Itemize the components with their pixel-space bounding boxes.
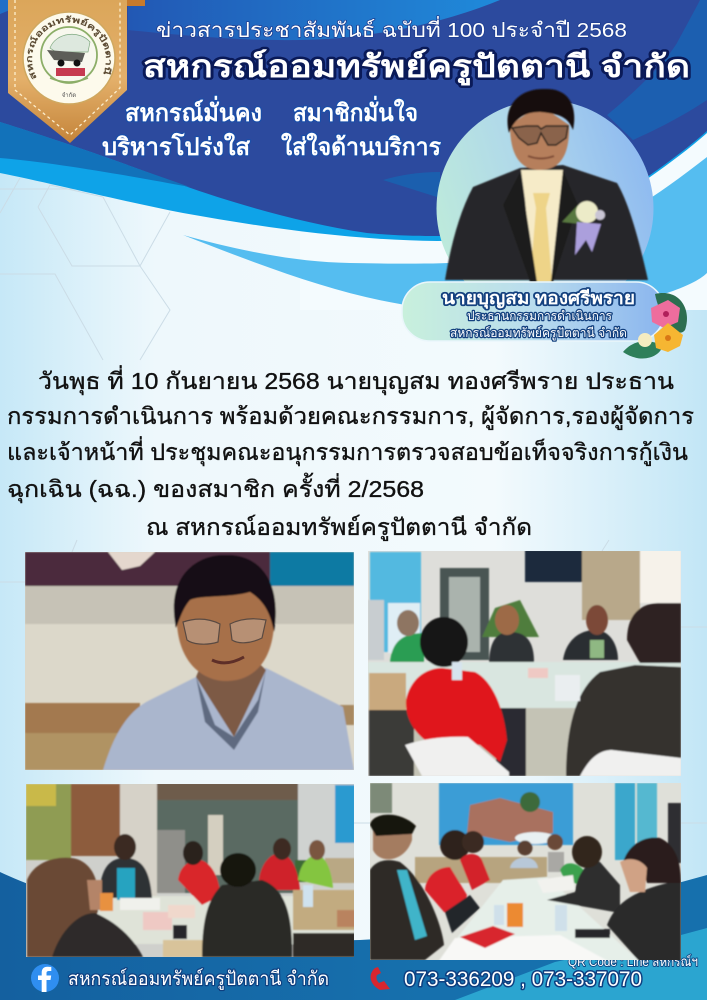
table items (452, 662, 462, 680)
body paragraph: กรรมการดำเนินการ พร้อมด้วยคณะกรรมการ, ผู้จัดการ,รองผู้จัดการ (7, 403, 694, 430)
dark navy field (0, 0, 707, 236)
background: bottom wave (0, 872, 707, 1000)
photo: meeting by glass doors (26, 783, 355, 957)
name plate (402, 282, 664, 341)
photo: meeting long table (370, 783, 681, 962)
red man 1 (425, 867, 467, 917)
slogans (102, 95, 441, 161)
slogans: สมาชิกมั่นใจ (293, 95, 418, 127)
hair (507, 89, 574, 133)
light blue swoosh (183, 157, 707, 313)
glasses (512, 126, 568, 145)
name plate: ประธานกรรมการดำเนินการ (467, 309, 612, 323)
green person (560, 862, 584, 884)
portrait of chairman (445, 89, 648, 282)
table (98, 896, 354, 944)
man left (370, 860, 444, 960)
dark man (547, 862, 620, 913)
body paragraph: และเจ้าหน้าที่ ประชุมคณะอนุกรรมการตรวจสอบข้อเท็จจริงการกู้เงิน (7, 436, 688, 466)
cyan band (0, 0, 707, 241)
woman left (27, 858, 98, 957)
portrait circle (436, 100, 654, 317)
logo seal (22, 12, 116, 104)
people (99, 858, 152, 898)
suit (445, 165, 648, 280)
slogans: ใส่ใจด้านบริการ (281, 132, 441, 161)
background: hexagon pattern (0, 178, 707, 823)
seated people (390, 633, 424, 662)
name plate: สหกรณ์ออมทรัพย์ครูปัตตานี จำกัด (450, 326, 627, 341)
footer: phone: 073-336209 , 073-337070 (404, 968, 642, 991)
title: สหกรณ์ออมทรัพย์ครูปัตตานี จำกัด (143, 49, 690, 86)
corsage (562, 205, 582, 224)
chairs (405, 737, 509, 776)
top band (128, 0, 500, 40)
table (458, 876, 640, 960)
footer: facebook (31, 964, 329, 992)
logo seal: จำกัด (62, 92, 76, 99)
background: top wave bands (0, 0, 707, 313)
body paragraph: ณ สหกรณ์ออมทรัพย์ครูปัตตานี จำกัด (146, 514, 532, 541)
back dark suit (566, 665, 681, 776)
logo ribbon (8, 0, 145, 143)
name plate: นายบุญสม ทองศรีพราย (442, 288, 635, 309)
slogans: บริหารโปร่งใส (102, 132, 250, 161)
table items (100, 893, 113, 911)
face (177, 590, 274, 681)
back dark person (202, 880, 292, 957)
footer: facebook: สหกรณ์ออมทรัพย์ครูปัตตานี จำกัด (68, 968, 329, 990)
icon: phone (371, 967, 390, 990)
body paragraph (7, 365, 694, 541)
icon: facebook (31, 964, 59, 992)
logo seal: สหกรณ์ออมทรัพย์ครูปัตตานี (27, 15, 112, 80)
red man 2 (460, 854, 490, 890)
back red shirt (406, 668, 507, 762)
mid blue band upper right (607, 0, 707, 140)
background: white swoosh area (300, 120, 707, 310)
slogans: สหกรณ์มั่นคง (125, 95, 262, 127)
pants (496, 708, 526, 776)
photo: chairman portrait (25, 552, 354, 770)
flower decoration (623, 293, 687, 358)
mid blue wedge at circle (383, 172, 440, 198)
table (368, 662, 681, 708)
header issue line: ข่าวสารประชาสัมพันธ์ ฉบับที่ 100 ประจำปี 2568 (156, 16, 627, 42)
head (510, 105, 569, 170)
body paragraph: วันพุธ ที่ 10 กันยายน 2568 นายบุญสม ทองศรีพราย ประธาน (38, 365, 674, 395)
body paragraph: ฉุกเฉิน (ฉฉ.) ของสมาชิก ครั้งที่ 2/2568 (7, 473, 424, 503)
photo: meeting with red shirt (368, 550, 681, 776)
mid blue wedge left (0, 122, 190, 187)
glasses (183, 619, 266, 644)
standing man (548, 852, 564, 872)
hair (174, 555, 276, 632)
center man (510, 857, 538, 868)
shirt (103, 668, 354, 770)
woman (607, 880, 681, 962)
